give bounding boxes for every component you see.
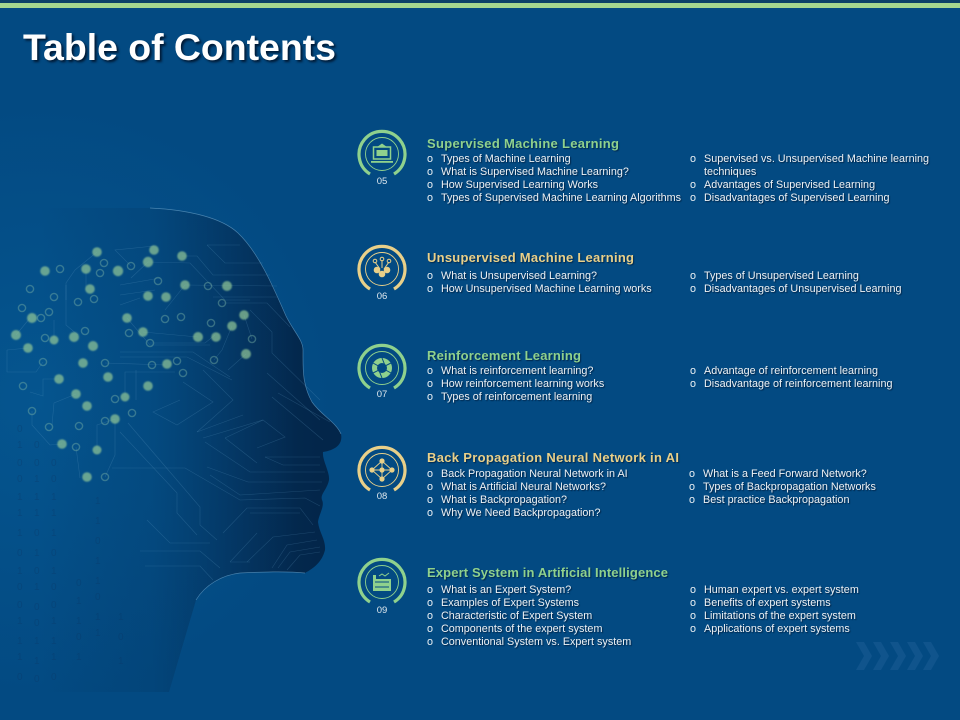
left list: What is reinforcement learning? (441, 365, 593, 377)
binary digit columns: 0 (17, 474, 23, 485)
right list: Best practice Backpropagation (703, 494, 849, 506)
right list: Types of Unsupervised Learning (704, 270, 859, 282)
left list: o (427, 378, 433, 390)
binary digit columns: 0 (34, 618, 40, 629)
illustration: AI head with circuit brain (7, 208, 341, 692)
section 05: Supervised Machine Learning (359, 131, 929, 204)
binary digit columns: 1 (76, 596, 82, 607)
binary digit columns: 0 (34, 440, 40, 451)
left list: Types of Machine Learning (441, 153, 571, 165)
binary digit columns: 1 (34, 582, 40, 593)
left list: o (427, 507, 433, 519)
heading: Unsupervised Machine Learning (427, 250, 634, 265)
binary digit columns: 0 (34, 528, 40, 539)
binary digit columns: 0 (95, 536, 101, 547)
binary digit columns: 1 (51, 566, 57, 577)
left list: o (427, 166, 433, 178)
binary digit columns: 0 (118, 632, 124, 643)
binary digit columns: 1 (95, 612, 101, 623)
right list: techniques (704, 166, 757, 178)
left list (427, 270, 652, 295)
section 06: Unsupervised Machine Learning (359, 246, 901, 302)
binary digit columns: 1 (95, 496, 101, 507)
left list: o (427, 636, 433, 648)
right list: o (689, 481, 695, 493)
binary digit columns: 0 (51, 600, 57, 611)
decorative chevrons (856, 642, 939, 670)
left list: o (427, 270, 433, 282)
binary digit columns: 1 (51, 616, 57, 627)
binary digit columns: 0 (17, 548, 23, 559)
binary digit columns: 0 (34, 566, 40, 577)
binary digit columns: 1 (17, 528, 23, 539)
right list: o (690, 283, 696, 295)
right list: What is a Feed Forward Network? (703, 468, 867, 480)
binary digit columns: 0 (34, 602, 40, 613)
left list: How Supervised Learning Works (441, 179, 599, 191)
icon: network badge 08: 08 (377, 491, 387, 502)
binary digit columns: 1 (118, 612, 124, 623)
left list: o (427, 468, 433, 480)
section 09: Expert System in Artificial Intelligence (359, 559, 859, 648)
binary digit columns: 0 (34, 458, 40, 469)
binary digit columns: 1 (95, 628, 101, 639)
binary digit columns: 1 (34, 492, 40, 503)
binary digit columns: 1 (17, 508, 23, 519)
section 07: Reinforcement Learning (359, 345, 892, 403)
left list: What is Unsupervised Learning? (441, 270, 597, 282)
right list: Types of Backpropagation Networks (703, 481, 876, 493)
left list: Types of reinforcement learning (441, 391, 592, 403)
binary digit columns: 1 (95, 576, 101, 587)
right list: o (689, 494, 695, 506)
binary digit columns: 1 (51, 636, 57, 647)
binary digit columns: 1 (34, 474, 40, 485)
right list (690, 153, 929, 204)
right list: o (690, 192, 696, 204)
right list: o (690, 153, 696, 165)
binary digit columns: 1 (17, 616, 23, 627)
binary digit columns: 0 (95, 592, 101, 603)
right list (689, 468, 876, 506)
binary digit columns: 1 (51, 492, 57, 503)
binary digit columns: 1 (34, 548, 40, 559)
left list: o (427, 494, 433, 506)
icon: swirl badge 07: 07 (377, 389, 387, 400)
right list (690, 584, 859, 635)
left list: Conventional System vs. Expert system (441, 636, 631, 648)
binary digit columns: 1 (17, 492, 23, 503)
right list: Disadvantage of reinforcement learning (704, 378, 892, 390)
binary digit columns: 1 (76, 652, 82, 663)
right list: o (690, 623, 696, 635)
ring nodes (18, 259, 256, 481)
right list: o (690, 270, 696, 282)
left list (427, 365, 605, 403)
right list (690, 365, 892, 390)
binary digit columns: 0 (51, 582, 57, 593)
left list: o (427, 192, 433, 204)
binary digit columns: 1 (76, 616, 82, 627)
left list (427, 153, 682, 204)
binary digit columns: 0 (17, 600, 23, 611)
left list: o (427, 283, 433, 295)
left list: Why We Need Backpropagation? (441, 507, 600, 519)
binary digit columns: 1 (34, 656, 40, 667)
right list: Advantage of reinforcement learning (704, 365, 878, 377)
binary digit columns: 1 (17, 566, 23, 577)
title: Table of Contents (23, 26, 336, 68)
right list: Disadvantages of Supervised Learning (704, 192, 889, 204)
glowing filled nodes (11, 245, 251, 482)
section 08: Back Propagation Neural Network in AI (359, 447, 876, 519)
icon: cluster badge 06 (359, 246, 405, 302)
icon: swirl badge 07 (359, 345, 405, 400)
icon: data factory badge 09 (359, 559, 405, 616)
circuit lines (7, 245, 330, 580)
left list: o (427, 179, 433, 191)
binary digit columns: 0 (51, 672, 57, 683)
left list: o (427, 391, 433, 403)
heading: Reinforcement Learning (427, 348, 581, 363)
icon: laptop badge 05: 05 (377, 176, 387, 187)
left list: What is Supervised Machine Learning? (441, 166, 629, 178)
icon: network badge 08 (359, 447, 405, 502)
heading: Supervised Machine Learning (427, 136, 619, 151)
binary digit columns: 0 (76, 632, 82, 643)
right list: Supervised vs. Unsupervised Machine learning (704, 153, 929, 165)
left list: How reinforcement learning works (441, 378, 605, 390)
left list: o (427, 481, 433, 493)
head silhouette (40, 208, 341, 692)
left list: o (427, 623, 433, 635)
right list: Benefits of expert systems (704, 597, 831, 609)
binary digit columns: 1 (51, 652, 57, 663)
left list: o (427, 584, 433, 596)
right list: o (690, 584, 696, 596)
binary digit columns: 1 (17, 440, 23, 451)
left list: Types of Supervised Machine Learning Algorithms (441, 192, 682, 204)
right list: o (690, 597, 696, 609)
left list: What is Artificial Neural Networks? (441, 481, 606, 493)
left list: o (427, 153, 433, 165)
icon: cluster badge 06: 06 (377, 291, 387, 302)
left list: How Unsupervised Machine Learning works (441, 283, 652, 295)
left list: o (427, 365, 433, 377)
binary digit columns: 1 (51, 528, 57, 539)
binary digit columns: 0 (51, 458, 57, 469)
heading: Back Propagation Neural Network in AI (427, 450, 679, 465)
left list (427, 468, 628, 519)
binary digit columns: 0 (17, 458, 23, 469)
binary digit columns: 1 (17, 636, 23, 647)
binary digit columns: 0 (51, 474, 57, 485)
right list: o (690, 179, 696, 191)
binary digit columns: 1 (51, 508, 57, 519)
left list: What is Backpropagation? (441, 494, 567, 506)
binary digit columns: 0 (34, 674, 40, 685)
binary digit columns: 0 (17, 582, 23, 593)
binary digit columns (17, 424, 124, 685)
right list: Advantages of Supervised Learning (704, 179, 875, 191)
right list: o (690, 365, 696, 377)
binary digit columns: 0 (51, 548, 57, 559)
top accent bar (0, 0, 960, 8)
right list: Human expert vs. expert system (704, 584, 859, 596)
binary digit columns: 1 (118, 656, 124, 667)
right list: Applications of expert systems (704, 623, 850, 635)
binary digit columns: 0 (17, 424, 23, 435)
binary digit columns: 1 (95, 556, 101, 567)
right list: Limitations of the expert system (704, 610, 856, 622)
right list: o (690, 610, 696, 622)
heading: Expert System in Artificial Intelligence (427, 565, 668, 580)
left list: Examples of Expert Systems (441, 597, 580, 609)
binary digit columns: 1 (17, 652, 23, 663)
right list: o (690, 378, 696, 390)
right list: Disadvantages of Unsupervised Learning (704, 283, 901, 295)
binary digit columns: 1 (34, 636, 40, 647)
head outline highlight (150, 208, 341, 600)
left list: Components of the expert system (441, 623, 602, 635)
binary digit columns: 0 (76, 578, 82, 589)
binary digit columns: 1 (34, 508, 40, 519)
left list: o (427, 610, 433, 622)
icon: data factory badge 09: 09 (377, 605, 387, 616)
right list (690, 270, 901, 295)
left list: What is an Expert System? (441, 584, 571, 596)
left list: Characteristic of Expert System (441, 610, 592, 622)
right list: o (689, 468, 695, 480)
icon: laptop badge 05 (359, 131, 405, 187)
left list (427, 584, 631, 648)
binary digit columns: 0 (17, 672, 23, 683)
left list: Back Propagation Neural Network in AI (441, 468, 628, 480)
binary digit columns: 1 (95, 516, 101, 527)
left list: o (427, 597, 433, 609)
